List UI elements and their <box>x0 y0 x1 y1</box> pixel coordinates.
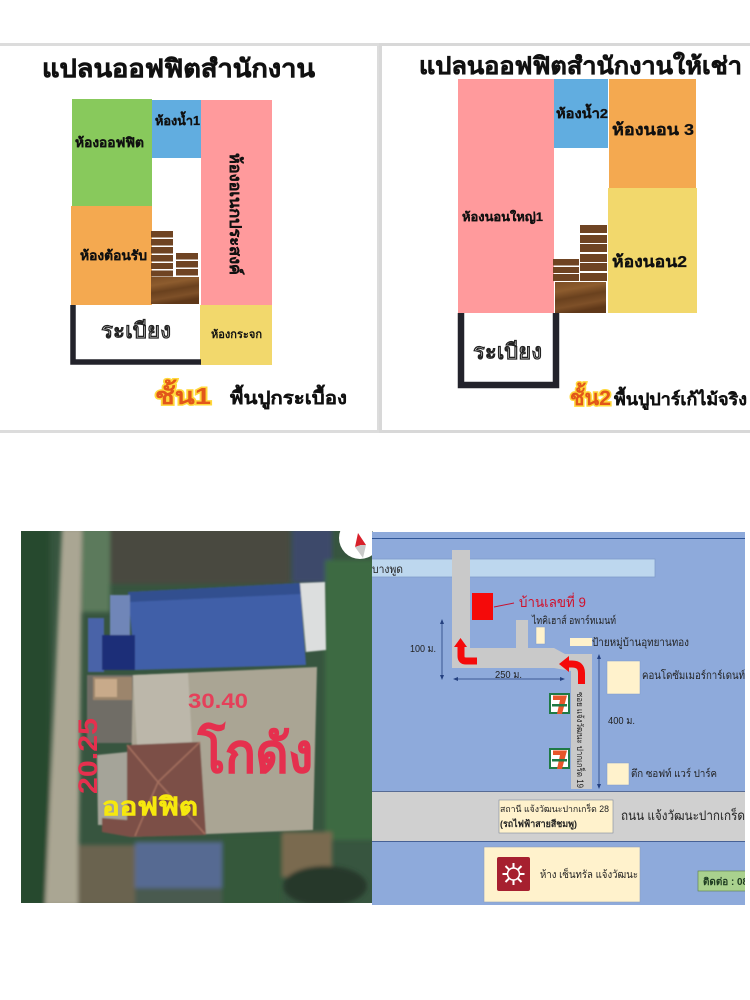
train station box <box>499 800 613 833</box>
room: multipurpose <box>201 100 272 305</box>
landmark: apartment <box>531 614 616 644</box>
room: bathroom 1: ห้องน้ำ1 <box>155 111 200 128</box>
icon: 7-eleven upper <box>549 693 570 714</box>
panel: ground floor plan <box>0 43 379 433</box>
label: warehouse width: 30.40 <box>188 690 248 713</box>
mall box <box>484 847 640 902</box>
room: bathroom 2 <box>554 79 608 148</box>
arrow: turn from soi <box>559 656 582 684</box>
room: master bedroom 1 <box>458 79 554 313</box>
label: office width: 20.25 <box>73 718 103 794</box>
heading: upper floor title: แปลนออฟฟิตสำนักงานให้เช่า <box>419 51 742 80</box>
room: multipurpose: ห้องอเนกประสงค์ <box>226 153 245 275</box>
floor finish note 2: พื้นปูปาร์เก้ไม้จริง <box>614 386 747 411</box>
room: glass room: ห้องกระจก <box>211 328 262 341</box>
stairs: upper floor <box>553 225 607 313</box>
room: bathroom 1 <box>152 100 201 158</box>
label: office: ออฟฟิต <box>102 793 198 821</box>
room: bedroom 3 <box>609 79 696 188</box>
contact box: ติดต่อ : 08 <box>703 876 748 888</box>
distance 100 m: 100 ม. <box>410 644 436 655</box>
train station box: สถานี แจ้งวัฒนะปากเกร็ด 28 <box>500 802 609 814</box>
room: office: ห้องออฟฟิต <box>75 135 144 150</box>
distance 250 m <box>453 670 565 681</box>
icon: 7-eleven lower <box>549 748 570 769</box>
mall box: ห้าง เซ็นทรัล แจ้งวัฒนะ <box>540 867 638 881</box>
roads <box>452 550 592 789</box>
arrow: turn to house <box>454 638 477 661</box>
contact box <box>698 871 748 891</box>
landmark: village sign: ป้ายหมู่บ้านอุทยานทอง <box>592 637 689 649</box>
landmark: condo <box>607 661 745 694</box>
satellite photo <box>18 528 375 906</box>
balcony: upper floor: ระเบียง <box>473 339 542 364</box>
canal: บางพูด <box>372 564 403 576</box>
room: bedroom 3: ห้องนอน 3 <box>612 121 694 139</box>
target house marker <box>472 593 586 620</box>
icon: compass <box>339 531 372 559</box>
room: bathroom 2: ห้องน้ำ2 <box>556 103 608 121</box>
panel: upper floor plan <box>379 43 750 433</box>
main road <box>372 791 745 842</box>
landmark: apartment: ไทคิเฮาส์ อพาร์ทเมนท์ <box>531 614 616 627</box>
distance 400 m <box>597 654 635 789</box>
room: reception <box>71 206 152 305</box>
distance 100 m <box>410 619 444 680</box>
room: glass room <box>200 305 272 365</box>
location map <box>365 532 748 905</box>
target house marker: บ้านเลขที่ 9 <box>519 593 586 610</box>
label: warehouse: โกดัง <box>197 722 313 784</box>
floor finish note 1: พื้นปูกระเบื้อง <box>230 384 347 410</box>
floor label 2: ชั้น2 <box>570 382 611 410</box>
canal <box>365 559 655 577</box>
floor label 1: ชั้น1 <box>155 379 211 409</box>
room: master bedroom 1: ห้องนอนใหญ่1 <box>462 209 543 224</box>
warehouse blue roof <box>128 583 306 670</box>
stairs: ground floor <box>151 231 199 304</box>
balcony: upper floor <box>461 313 556 385</box>
balcony: ground floor: ระเบียง <box>101 318 171 343</box>
train station box: (รถไฟฟ้าสายสีชมพู) <box>500 818 577 831</box>
room: office <box>72 99 152 206</box>
room: bedroom 2: ห้องนอน2 <box>612 253 687 271</box>
landmark: software park <box>607 763 717 785</box>
soi name: ซอย แจ้งวัฒนะ ปากเกร็ด 19 <box>575 692 587 788</box>
heading: ground floor title: แปลนออฟฟิตสำนักงาน <box>42 55 315 83</box>
distance 400 m: 400 ม. <box>608 716 635 727</box>
balcony: ground floor <box>73 305 201 362</box>
distance 250 m: 250 ม. <box>495 670 522 681</box>
landmark: software park: ตึก ซอฟท์ แวร์ ปาร์ค <box>631 767 717 780</box>
room: reception: ห้องต้อนรับ <box>80 248 147 263</box>
room: bedroom 2 <box>608 188 697 313</box>
